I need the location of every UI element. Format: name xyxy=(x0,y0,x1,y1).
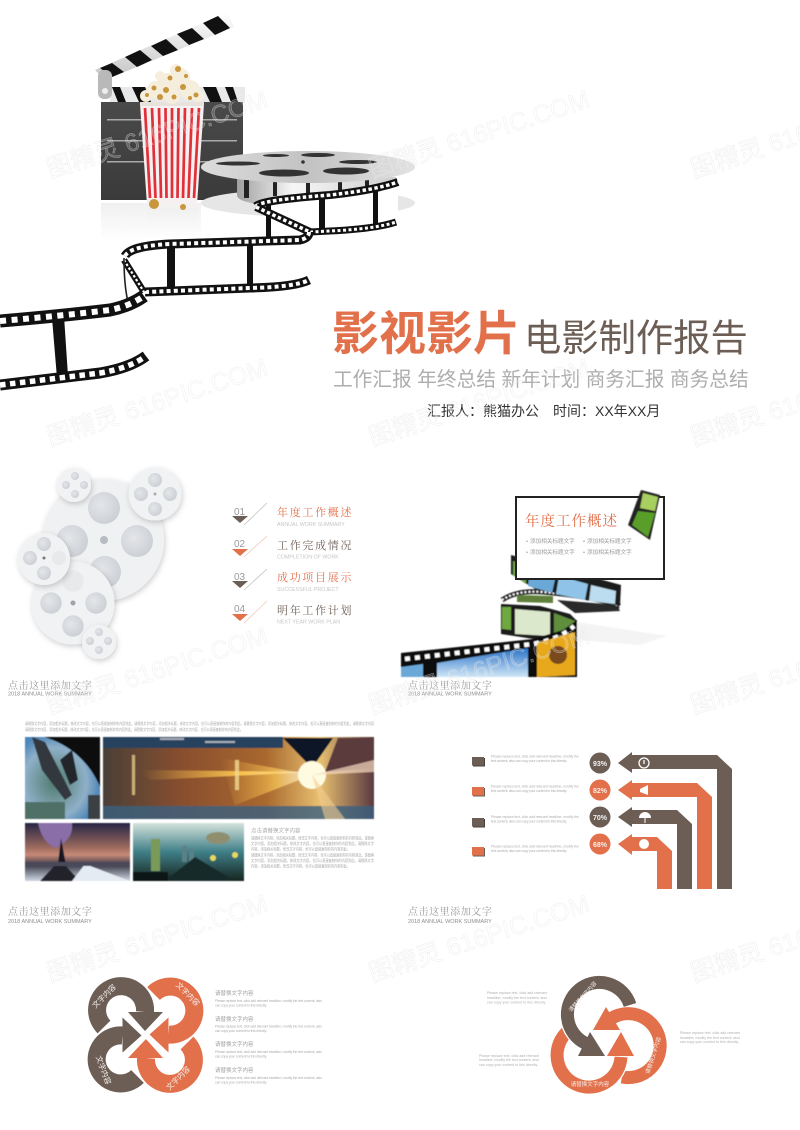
list item 03 xyxy=(232,569,353,593)
badge 93%: 93% xyxy=(593,761,608,768)
watermark layer: 图精灵 616PIC.COM xyxy=(365,622,593,720)
text block: cycle right: can copy your content to this directly. xyxy=(680,1040,739,1044)
ring labels xyxy=(567,979,663,1088)
image: space station xyxy=(25,737,100,819)
info card xyxy=(516,497,664,579)
text block: cycle top left: headline, modify the text content, also xyxy=(487,996,547,1000)
list item 03: 成功项目展示 xyxy=(277,569,353,585)
text block: gallery note: 请替换文字内容，添加相关标题，修改文字内容，也可以直接复制你的内容到此。请替换 xyxy=(251,836,374,840)
list item 04: 明年工作计划 xyxy=(277,602,353,618)
card bullets xyxy=(526,537,632,556)
watermark layer xyxy=(43,86,800,988)
legend row 1: text content, also can copy your content to this directly. xyxy=(491,759,567,763)
text block: gallery note: 点击请替换文字内容 xyxy=(251,826,301,834)
arrow 82% xyxy=(618,780,712,889)
text block: cover subtitle: 工作汇报 年终总结 新年计划 商务汇报 商务总结 xyxy=(333,369,749,391)
text block: knot descriptions: can copy your content to this directly. xyxy=(215,1054,267,1058)
panel: cover film illustration xyxy=(0,12,415,385)
strip segment middle xyxy=(124,232,310,302)
text block: knot descriptions: can copy your content to this directly. xyxy=(215,1029,267,1033)
text block: knot descriptions: Please replace text, click add relevant headline, modify the text content, also xyxy=(215,1024,322,1028)
text block: gallery intro: 请替换文字内容，添加相关标题，修改文字内容，也可以直接复制你的内容到此。请替换文字内容，添加相关标题，修改文字内容，也可以直接复制你的内容到此。 xyxy=(25,727,243,732)
arrow 93% xyxy=(618,752,732,889)
watermark layer: 图精灵 616PIC.COM xyxy=(43,622,271,720)
text block: knot descriptions: Please replace text, click add relevant headline, modify the text content, also xyxy=(215,999,322,1003)
text block: knot descriptions: 请替换文字内容 xyxy=(215,989,254,997)
footer: slide 5: 点击这里添加文字 xyxy=(408,903,492,918)
card bullets: 添加相关标题文字 xyxy=(587,537,632,545)
text block: gallery note: 内容，添加相关标题，修改文字内容，也可以直接复制你的内容到此。 xyxy=(251,864,350,868)
image: light burst xyxy=(103,737,374,819)
text block: cycle lower left: can copy your content to this directly. xyxy=(479,1063,538,1067)
ring labels: 文字内容 xyxy=(90,981,118,1010)
badge 68% xyxy=(590,834,610,854)
footer: slide 2: 点击这里添加文字 xyxy=(8,677,92,692)
legend row 4: Please replace text, click add relevant headline, modify the xyxy=(491,844,579,848)
icon: megaphone xyxy=(640,785,648,795)
icon: medium reel left xyxy=(18,533,70,585)
arrow: brown xyxy=(567,982,630,1056)
text block: gallery note: 文字内容，添加相关标题，修改文字内容，也可以直接复制你的内容到此。请替换文字 xyxy=(251,841,374,846)
badge 93% xyxy=(590,752,610,774)
text block: gallery note: 请替换文字内容，添加相关标题，修改文字内容，也可以直接复制你的内容到此。请替换 xyxy=(251,852,374,858)
text block: knot descriptions: Please replace text, click add relevant headline, modify the text content, also xyxy=(215,1076,322,1080)
icon: film reel xyxy=(201,151,415,217)
watermark layer: 图精灵 616PIC.COM xyxy=(365,354,593,452)
badge 70%: 70% xyxy=(593,815,608,822)
text block: cycle lower left: Please replace text, click add relevant xyxy=(479,1054,539,1058)
knot centre cross xyxy=(122,1013,168,1058)
text block: gallery note: 内容，添加相关标题，修改文字内容，也可以直接复制你的内容到此。 xyxy=(251,846,350,852)
strip segment lower xyxy=(0,296,147,385)
card heading: 年度工作概述 xyxy=(525,510,618,531)
text block: cycle lower left: headline, modify the text content, also xyxy=(479,1058,539,1062)
icon: film strip xyxy=(0,181,398,385)
icon: umbrella xyxy=(639,812,651,823)
footer: slide 4: 点击这里添加文字 xyxy=(8,903,92,918)
watermark layer: 图精灵 616PIC.COM xyxy=(43,890,271,988)
icon: popcorn bucket xyxy=(140,64,204,240)
text block: knot descriptions: Please replace text, click add relevant headline, modify the text content, also xyxy=(215,1050,322,1054)
text block: cycle lower left xyxy=(479,1054,539,1067)
arrow: top left xyxy=(97,986,163,1031)
list item 01 xyxy=(232,503,353,528)
card bullets: • xyxy=(583,539,585,545)
footer: slide 4: 2018 ANNUAL WORK SUMMARY xyxy=(8,919,92,925)
footer: slide 3: 2018 ANNUAL WORK SUMMARY xyxy=(408,692,492,698)
text block: cycle top left: Please replace text, click add relevant xyxy=(487,991,547,995)
legend row 3: text content, also can copy your content to this directly. xyxy=(491,820,567,824)
icon: small reel top xyxy=(57,468,91,502)
ring labels: 请替换文字内容 xyxy=(571,1080,610,1088)
badge 68%: 68% xyxy=(593,842,608,849)
card bullets: • xyxy=(583,550,585,556)
text block: knot descriptions: can copy your content to this directly. xyxy=(215,1004,267,1008)
card bullets: 添加相关标题文字 xyxy=(587,548,632,556)
arrow: lower right xyxy=(128,1039,194,1084)
ring labels: 请替换文字内容 xyxy=(567,979,599,1014)
text block: gallery intro: 请替换文字内容，添加相关标题，修改文字内容，也可以直接复制你的内容到此。请替换文字内容，添加相关标题，修改文字内容，也可以直接复制你的内容到此。请替换文字内容，添加相关标题，修改文字内容，也可以直接复制你的内容到此。请替换文字内容 xyxy=(25,721,374,726)
ring labels: 文字内容 xyxy=(164,1063,192,1092)
arrow: lower left xyxy=(97,1018,142,1083)
text block: cycle right xyxy=(680,1031,740,1044)
list item 02: 02 xyxy=(234,539,246,550)
ring labels: 文字内容 xyxy=(174,980,203,1008)
footer: slide 4 xyxy=(8,903,92,925)
heading: cover title: 电影制作报告 xyxy=(524,317,748,359)
text block: knot descriptions: 请替换文字内容 xyxy=(215,1040,254,1048)
legend row 1 xyxy=(472,754,579,766)
panel: contents list xyxy=(232,503,353,626)
text block: gallery note xyxy=(251,826,374,868)
list item 02: COMPLETION OF WORK xyxy=(277,554,339,560)
text block: gallery intro xyxy=(25,721,374,732)
panel: three-arrow cycle diagram xyxy=(479,979,740,1088)
arrow: top right xyxy=(150,987,194,1052)
footer: slide 5: 2018 ANNUAL WORK SUMMARY xyxy=(408,919,492,925)
icon: small reel bottom xyxy=(82,625,116,659)
card bullets: 添加相关标题文字 xyxy=(530,548,575,556)
legend row 3 xyxy=(472,815,579,828)
list item 04 xyxy=(232,601,353,626)
list item 02 xyxy=(232,536,353,560)
watermark layer: 图精灵 616PIC.COM xyxy=(43,354,271,452)
image: alien planet xyxy=(25,823,130,881)
text block: cycle top left xyxy=(487,991,547,1004)
icon: big lower reel xyxy=(32,562,114,644)
text block: cycle right: Please replace text, click add relevant xyxy=(680,1031,740,1035)
card bullets: 添加相关标题文字 xyxy=(530,537,575,545)
panel: contents illustration of paper reels xyxy=(18,468,182,659)
text block: reporter and date: 汇报人：熊猫办公 时间：XX年XX月 xyxy=(427,403,660,419)
list item 01: 年度工作概述 xyxy=(277,504,353,520)
list item 03: 03 xyxy=(234,572,246,583)
icon: pie xyxy=(639,839,649,849)
legend row 4: text content, also can copy your content to this directly. xyxy=(491,849,567,853)
footer: slide 5 xyxy=(408,903,492,925)
badge 82%: 82% xyxy=(593,788,608,795)
watermark layer: 图精灵 616PIC.COM xyxy=(43,86,271,184)
legend row 3: Please replace text, click add relevant headline, modify the xyxy=(491,815,579,819)
legend row 1: Please replace text, click add relevant headline, modify the xyxy=(491,754,579,758)
legend row 2: Please replace text, click add relevant headline, modify the xyxy=(491,784,579,788)
text block: cycle top left: can copy your content to this directly. xyxy=(487,1000,546,1004)
icon: clapperboard xyxy=(95,12,245,241)
watermark layer: 图精灵 616PIC.COM xyxy=(365,890,593,988)
list item 04: NEXT YEAR WORK PLAN xyxy=(277,620,340,626)
list item 01: ANNUAL WORK SUMMARY xyxy=(277,522,345,528)
legend row 4 xyxy=(472,844,579,856)
panel: picture gallery xyxy=(25,721,374,881)
legend row 2: text content, also can copy your content to this directly. xyxy=(491,789,567,793)
panel: percentage arrows chart xyxy=(472,752,732,889)
icon: power xyxy=(639,758,649,768)
legend row 2 xyxy=(472,784,579,796)
icon: large reel xyxy=(42,479,164,601)
film strip photos xyxy=(401,555,667,677)
text block: knot descriptions xyxy=(215,989,322,1084)
arrow: right orange xyxy=(593,1007,660,1078)
small film piece xyxy=(628,490,660,540)
panel: film strip with overview card xyxy=(401,490,667,677)
list item 02: 工作完成情况 xyxy=(277,537,353,553)
arrow 68% xyxy=(618,834,672,889)
badge 70% xyxy=(590,806,610,828)
panel: four-arrow knot diagram xyxy=(90,980,203,1092)
footer: slide 2: 2018 ANNUAL WORK SUMMARY xyxy=(8,692,92,698)
text block: gallery note: 文字内容，添加相关标题，修改文字内容，也可以直接复制你的内容到此。请替换文字 xyxy=(251,858,374,863)
badge 82% xyxy=(590,780,610,800)
ring labels: 请替换文字内容 xyxy=(643,1035,663,1075)
text block: cycle right: headline, modify the text content, also xyxy=(680,1036,740,1040)
arrow: lower left orange xyxy=(557,1031,634,1087)
list item 01: 01 xyxy=(234,507,246,518)
watermark layer: 图精灵 616PIC.COM xyxy=(365,86,593,184)
arrow 70% xyxy=(618,807,692,889)
strip segment upper xyxy=(255,181,398,238)
ring labels: 文字内容 xyxy=(94,1054,114,1086)
heading: cover title accent: 影视影片 xyxy=(332,307,520,360)
icon: medium reel right xyxy=(128,468,182,520)
ring labels xyxy=(90,980,203,1092)
text block: knot descriptions: 请替换文字内容 xyxy=(215,1066,254,1074)
footer: slide 3: 点击这里添加文字 xyxy=(408,677,492,692)
card bullets: • xyxy=(526,539,528,545)
image: future city xyxy=(133,823,244,881)
list item 04: 04 xyxy=(234,604,246,615)
text block: knot descriptions: can copy your content to this directly. xyxy=(215,1080,267,1084)
card bullets: • xyxy=(526,550,528,556)
list item 03: SUCCESSFUL PROJECT xyxy=(277,587,339,593)
text block: knot descriptions: 请替换文字内容 xyxy=(215,1015,254,1023)
